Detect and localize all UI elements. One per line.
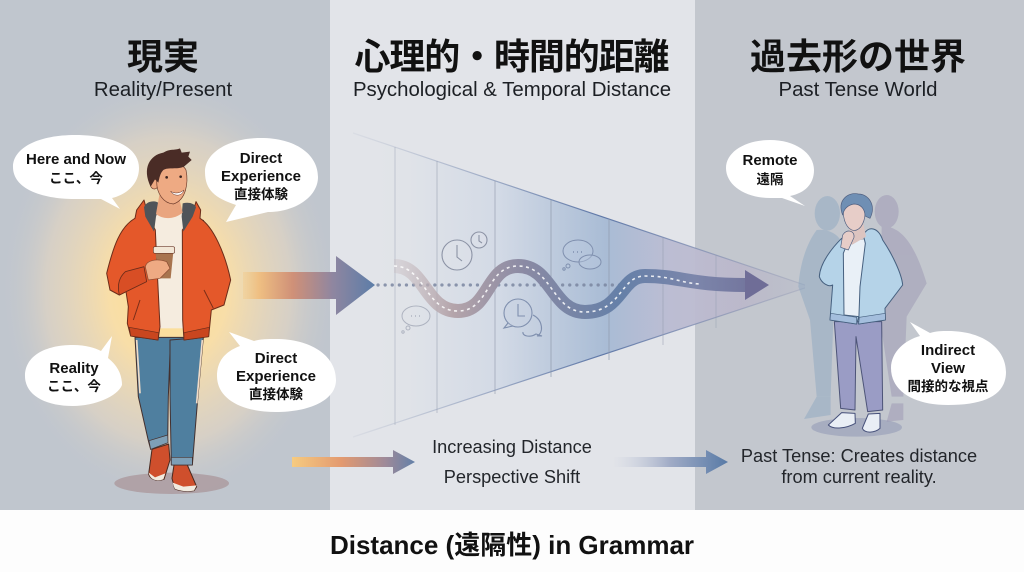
callout: here and now bbox=[13, 135, 139, 209]
person: present self bbox=[107, 148, 231, 494]
label: increasing distance: Increasing Distance bbox=[432, 437, 592, 457]
caption: past tense note: Past Tense: Creates distance bbox=[741, 446, 977, 466]
jeans cuffs and seam bbox=[149, 435, 192, 465]
shirt bbox=[155, 213, 184, 328]
panel: reality background bbox=[0, 0, 330, 511]
callout: direct experience bottom bbox=[217, 332, 336, 412]
hair bbox=[841, 194, 872, 218]
sleeve fold and hems bbox=[118, 267, 147, 295]
callout: reality bbox=[25, 336, 122, 406]
backpack straps bbox=[133, 217, 207, 267]
heading: distance bbox=[353, 36, 671, 101]
icon: thought bubble left bbox=[402, 306, 430, 333]
ghost left bbox=[798, 196, 842, 419]
arrow: lower blue bbox=[612, 450, 728, 474]
coffee cup bbox=[155, 252, 173, 278]
footer title: Distance (遠隔性) in Grammar bbox=[330, 530, 694, 560]
callout: direct experience bottom: Direct bbox=[255, 350, 297, 367]
hand bbox=[145, 260, 170, 280]
ground shadow bbox=[114, 473, 229, 494]
heading: past tense world: Past Tense World bbox=[778, 79, 938, 101]
ear bbox=[150, 178, 159, 189]
icon: thought bubbles centre bbox=[563, 240, 601, 270]
heading: reality: Reality/Present bbox=[94, 79, 232, 101]
callout: direct experience top bbox=[205, 138, 318, 222]
panel: past tense background bbox=[695, 0, 1024, 511]
heading: past tense world bbox=[750, 36, 966, 101]
caption: past tense note bbox=[741, 446, 977, 487]
shirt bbox=[843, 240, 865, 317]
perspective cone chart bbox=[353, 133, 805, 437]
icon: clocks bbox=[442, 232, 487, 270]
callout: reality: ここ、今 bbox=[47, 378, 101, 394]
pocket bbox=[133, 290, 213, 320]
callout: direct experience top: 直接体験 bbox=[234, 186, 288, 202]
face bbox=[157, 164, 187, 204]
callout: direct experience bottom: 直接体験 bbox=[249, 386, 303, 402]
jacket right half bbox=[859, 229, 903, 324]
callout: indirect view: Indirect bbox=[921, 342, 975, 359]
callout: remote: 遠隔 bbox=[756, 171, 784, 187]
arrow: lower orange bbox=[292, 450, 415, 474]
hair bbox=[147, 148, 192, 187]
jacket left half bbox=[819, 238, 859, 324]
callout: remote bbox=[726, 140, 814, 206]
neck bbox=[156, 195, 183, 218]
callout: direct experience top: Direct bbox=[240, 150, 282, 167]
callout: reality: Reality bbox=[49, 360, 99, 377]
heading: reality: 現実 bbox=[127, 36, 199, 77]
heading: past tense world: 過去形の世界 bbox=[750, 36, 966, 77]
callout: indirect view: View bbox=[931, 360, 965, 377]
trousers bbox=[834, 322, 883, 412]
smile and eyes bbox=[171, 190, 184, 195]
pockets and hem bbox=[830, 313, 885, 324]
hand at chin bbox=[841, 231, 854, 250]
ghost right bbox=[875, 195, 927, 422]
jacket hems bbox=[129, 327, 209, 340]
warm glow behind present person bbox=[0, 95, 330, 500]
callout: remote: Remote bbox=[742, 152, 798, 169]
callout: indirect view: 間接的な視点 bbox=[908, 378, 989, 394]
winding road with arrow bbox=[394, 266, 769, 312]
jeans highlights bbox=[137, 340, 202, 403]
shoes bbox=[149, 444, 170, 480]
heading: distance: 心理的・時間的距離 bbox=[354, 36, 670, 77]
icon: clock speech bubble bbox=[504, 299, 542, 336]
footer band bbox=[0, 510, 1024, 572]
face bbox=[843, 204, 865, 231]
jacket left half bbox=[107, 200, 160, 340]
shoes bbox=[828, 413, 880, 432]
callout: here and now: ここ、今 bbox=[49, 170, 103, 186]
heading: distance: Psychological & Temporal Distance bbox=[353, 79, 671, 101]
callout: direct experience top: Experience bbox=[221, 168, 301, 185]
hood lining bbox=[144, 201, 196, 232]
callout: indirect view bbox=[891, 322, 1006, 405]
jeans bbox=[135, 337, 203, 465]
caption: past tense note: from current reality. bbox=[781, 467, 937, 487]
ground shadow bbox=[811, 418, 902, 437]
callout: here and now: Here and Now bbox=[26, 151, 126, 168]
jacket right half bbox=[182, 202, 231, 340]
heading: reality bbox=[94, 36, 232, 101]
neck bbox=[848, 223, 866, 245]
person: faded selves and past self bbox=[798, 194, 927, 437]
label: perspective shift: Perspective Shift bbox=[444, 467, 580, 487]
panel: distance background bbox=[330, 0, 695, 511]
arrow: reality to distance bbox=[243, 256, 375, 315]
dotted centre line bbox=[378, 283, 640, 287]
callout: direct experience bottom: Experience bbox=[236, 368, 316, 385]
